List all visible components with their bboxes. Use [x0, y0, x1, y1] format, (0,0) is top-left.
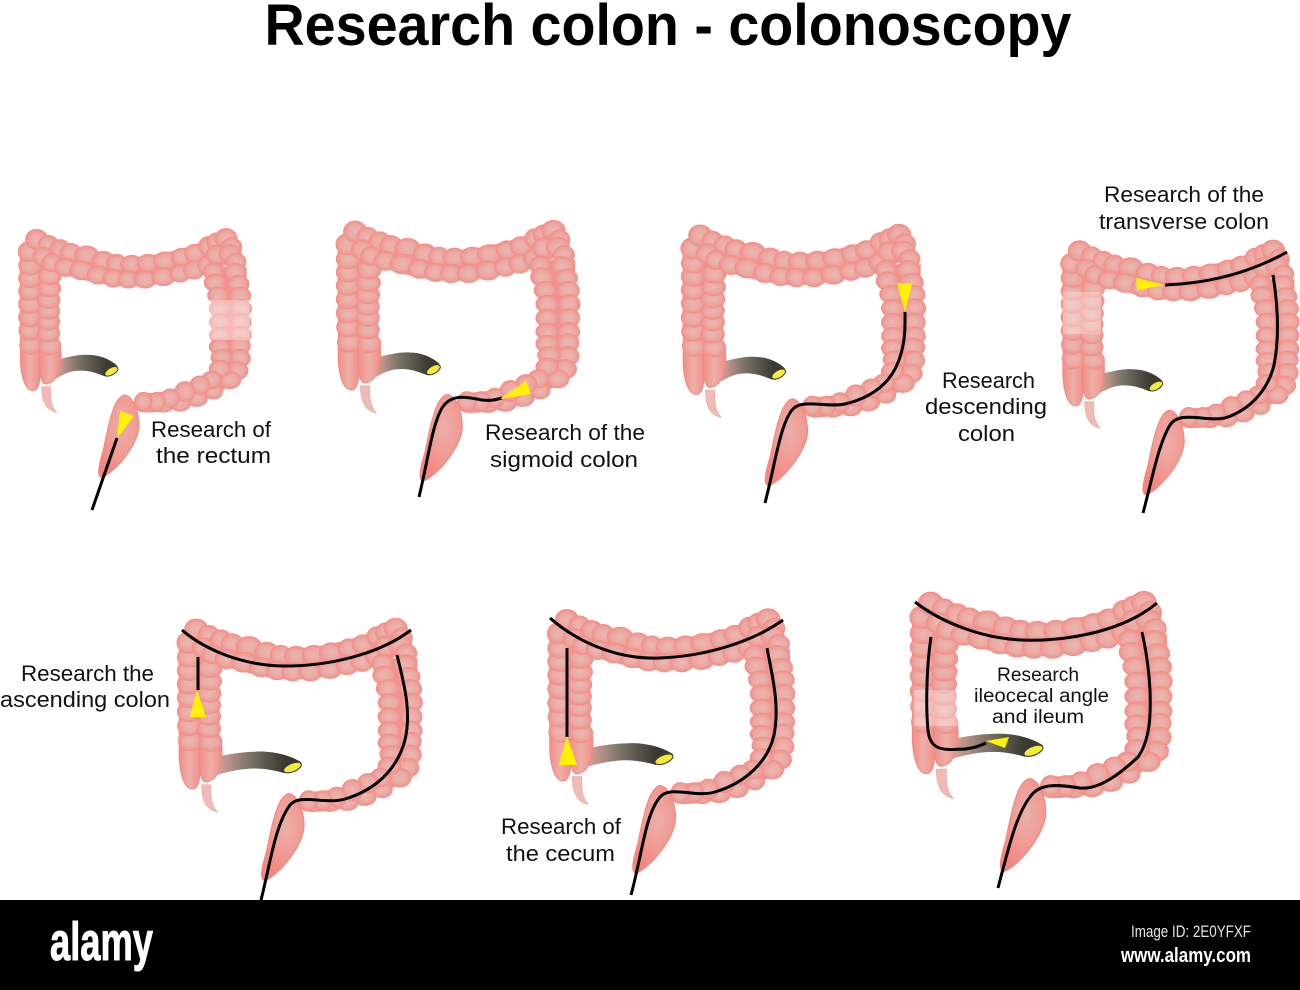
label: the rectum [156, 443, 271, 468]
panel: ascending colon [0, 618, 422, 900]
scope line [765, 312, 905, 503]
ileum [55, 355, 120, 378]
scope line transverse [915, 602, 1157, 640]
watermark patch [914, 690, 959, 726]
yellow tip [986, 737, 1009, 748]
panel: rectum [18, 229, 272, 510]
label: colon [958, 421, 1015, 446]
scope line [92, 438, 117, 510]
label: Research the [21, 661, 154, 686]
label: Research [997, 665, 1079, 686]
yellow tip [1136, 278, 1165, 290]
ileum [951, 734, 1044, 759]
scope line ascending [196, 657, 200, 690]
label [974, 665, 1109, 728]
panel: sigmoid colon [336, 220, 645, 497]
label [501, 814, 622, 866]
yellow tip [559, 736, 577, 765]
label: sigmoid colon [490, 447, 638, 472]
footer logo: alamy [50, 912, 153, 972]
panel: descending colon [681, 224, 1047, 503]
label [151, 417, 272, 468]
scope line [261, 655, 408, 900]
image id: Image ID: 2E0YFXF [1131, 922, 1251, 941]
colon [177, 618, 422, 881]
colon [910, 591, 1172, 872]
watermark patch [1063, 292, 1101, 334]
colon [1061, 240, 1299, 495]
footer bar [0, 900, 1300, 990]
colon [336, 220, 580, 481]
scope line [998, 632, 1150, 888]
label [925, 368, 1047, 446]
ileum [216, 751, 303, 775]
panel: transverse colon [1061, 182, 1299, 513]
panel: ileocecal angle and ileum [910, 591, 1172, 888]
scope line [419, 397, 502, 497]
scope line ascending [566, 648, 568, 737]
label [1099, 182, 1269, 234]
label: the cecum [506, 841, 615, 866]
yellow tip [117, 411, 134, 438]
scope line ascending [927, 637, 986, 750]
ileum [374, 352, 442, 377]
scope line transverse [1165, 252, 1287, 285]
yellow tip [897, 283, 912, 312]
label: Research of the [1104, 182, 1264, 207]
ileum [719, 357, 787, 381]
label: Research of [151, 417, 272, 442]
label [485, 420, 645, 472]
colon [681, 224, 926, 486]
ileum [586, 743, 674, 767]
label: descending [925, 394, 1047, 419]
scope line transverse [550, 618, 783, 658]
label: and ileum [992, 707, 1084, 728]
watermark patch [209, 300, 250, 340]
scope line [1143, 275, 1277, 513]
label [0, 661, 170, 712]
label: Research of the [485, 420, 645, 445]
label: Research [942, 368, 1035, 393]
colon [18, 229, 251, 478]
website: www.alamy.com [1120, 945, 1251, 967]
label: transverse colon [1099, 209, 1269, 234]
scope line transverse [182, 630, 411, 666]
label: Research of [501, 814, 622, 839]
ileum [1098, 369, 1164, 393]
yellow tip [190, 690, 206, 717]
yellow tip [500, 381, 531, 399]
scope line [631, 648, 776, 895]
label: ileocecal angle [974, 686, 1109, 707]
panel: cecum [501, 609, 795, 895]
colon [547, 609, 795, 873]
label: ascending colon [0, 687, 170, 712]
